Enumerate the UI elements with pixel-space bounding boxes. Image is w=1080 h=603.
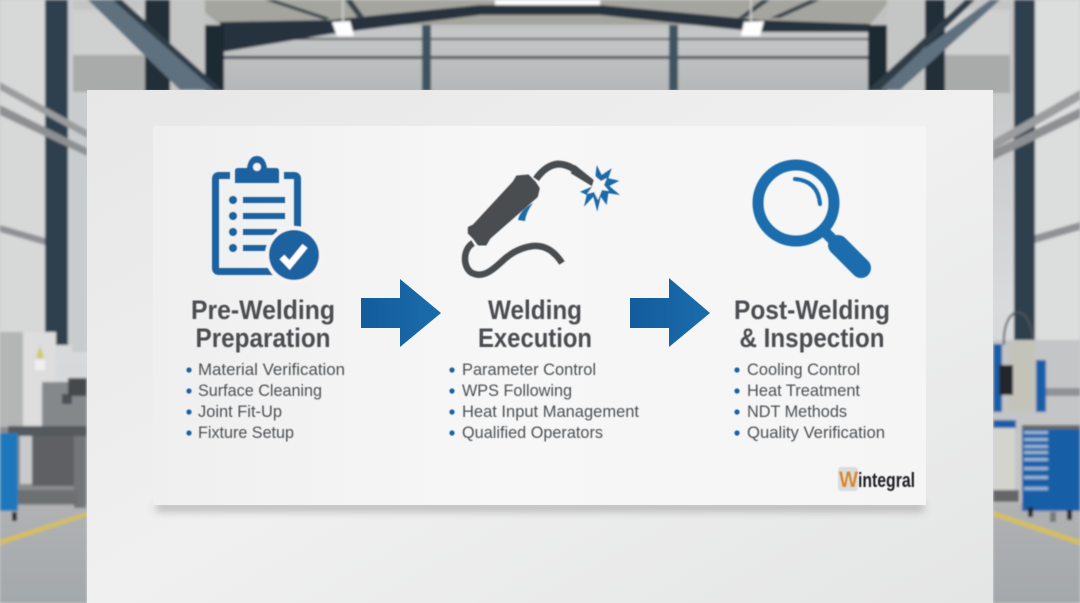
checklist: inspection items: Heat Treatment <box>747 382 860 400</box>
white board <box>153 126 926 505</box>
heading line two: Execution <box>478 323 592 353</box>
right structure <box>887 0 1080 92</box>
logo: Wintegral <box>838 467 915 492</box>
column: pre-welding preparation <box>186 156 345 442</box>
checklist: preparation items: Joint Fit-Up <box>198 403 282 421</box>
checklist: preparation items: Fixture Setup <box>198 424 294 442</box>
checklist: execution items: WPS Following <box>462 382 572 400</box>
heading line two: & Inspection <box>740 323 884 353</box>
right floor and equipment <box>993 340 1080 512</box>
checklist: inspection items: Quality Verification <box>747 424 885 442</box>
heading: welding execution: Welding <box>488 295 582 325</box>
column: welding execution <box>449 164 639 442</box>
left floor and equipment <box>0 425 87 515</box>
checklist: inspection items <box>734 361 885 442</box>
logo: Wintegral: integral <box>858 470 915 492</box>
checklist: execution items: Parameter Control <box>462 361 596 379</box>
checklist: execution items <box>449 361 639 442</box>
checklist: preparation items <box>186 361 345 442</box>
heading: pre-welding preparation: Pre-Welding <box>191 295 335 325</box>
checklist: inspection items: NDT Methods <box>747 403 847 421</box>
checklist: inspection items: Cooling Control <box>747 361 860 379</box>
icon: clipboard with check <box>216 156 323 284</box>
checklist: execution items: Heat Input Management <box>462 403 639 421</box>
board shadow <box>156 502 924 512</box>
icon: welding torch with spark <box>465 164 620 275</box>
checklist: preparation items: Material Verification <box>198 361 345 379</box>
left structure <box>0 0 205 92</box>
icon: magnifying glass <box>758 165 861 268</box>
heading line two: Preparation <box>196 323 330 353</box>
logo: Wintegral: W <box>839 467 858 492</box>
column: post-welding and inspection <box>734 165 890 442</box>
heading: post-welding: Post-Welding <box>734 295 890 325</box>
checklist: preparation items: Surface Cleaning <box>198 382 322 400</box>
checklist: execution items: Qualified Operators <box>462 424 603 442</box>
wall panel <box>87 90 993 603</box>
arrow: execution to inspection <box>630 278 710 347</box>
arrow: preparation to execution <box>361 279 441 347</box>
